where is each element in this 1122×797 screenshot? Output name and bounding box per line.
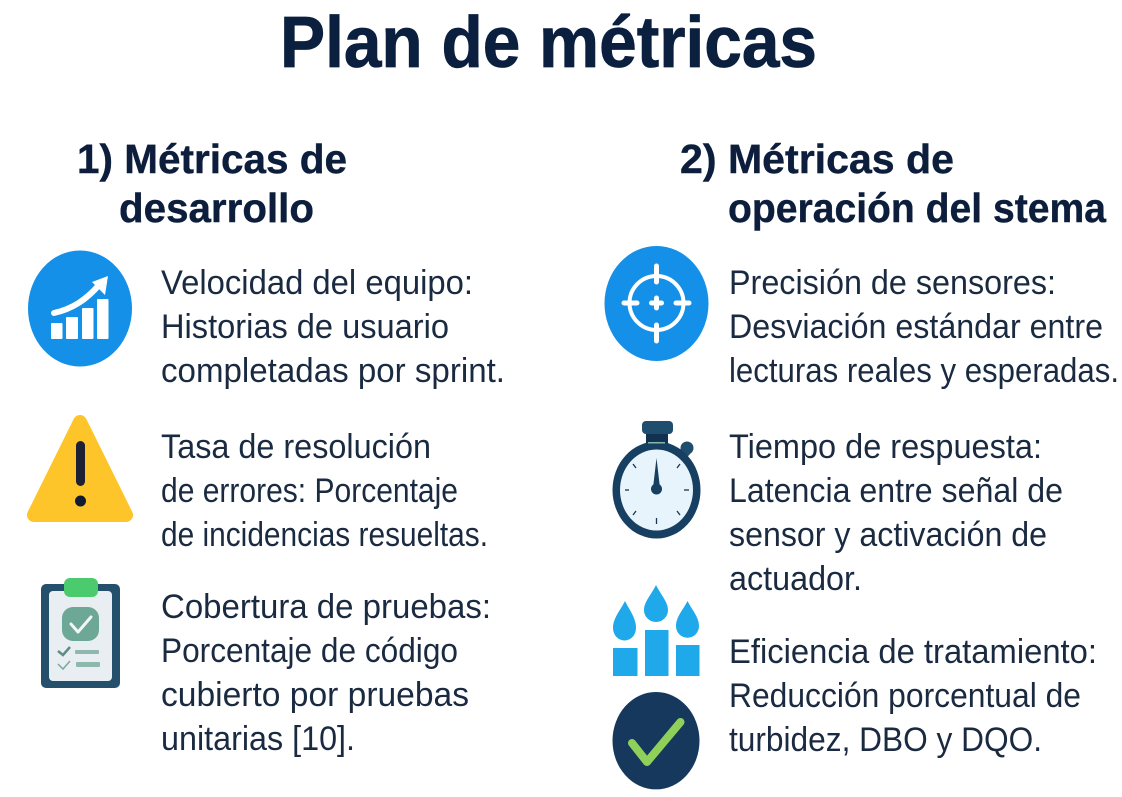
heading: métricas de operación: operación del stema [728,185,1107,231]
text: eficiencia de tratamiento [729,633,1097,759]
icon: stopwatch [612,421,700,538]
text: precisión de sensores: Precisión de sensores: [729,264,1056,302]
icon: growth chart [28,250,132,366]
icon: water drops and bars [613,585,700,676]
heading: métricas de operación [680,136,1107,231]
icon: clipboard [41,578,120,688]
text: precisión de sensores: Desviación estándar entre [729,308,1103,346]
heading: métricas de operación: 2) Métricas de [680,136,954,182]
text: tasa de resolución: de incidencias resueltas. [161,516,488,554]
text: tiempo de respuesta: sensor y activación de [729,516,1047,554]
text: cobertura de pruebas: unitarias [10]. [161,720,355,758]
text: eficiencia de tratamiento: Reducción porcentual de [729,677,1081,715]
text: tasa de resolución [161,428,488,554]
text: cobertura de pruebas: cubierto por pruebas [161,676,469,714]
title: Plan de métricas [280,3,817,83]
text: cobertura de pruebas: Porcentaje de código [161,632,458,670]
icon: target [604,246,708,361]
text: velocidad del equipo [161,264,505,390]
text: velocidad del equipo: Velocidad del equipo: [161,264,473,302]
icon: warning triangle [34,422,126,515]
icon: check circle [612,692,700,789]
text: tasa de resolución: Tasa de resolución [161,428,431,466]
heading: métricas de desarrollo [77,136,347,231]
text: cobertura de pruebas [161,588,491,758]
text: cobertura de pruebas: Cobertura de pruebas: [161,588,491,626]
text: tiempo de respuesta: actuador. [729,560,862,598]
heading: métricas de desarrollo: 1) Métricas de [77,136,347,182]
text: precisión de sensores [729,264,1119,390]
text: velocidad del equipo: Historias de usuario [161,308,449,346]
text: tiempo de respuesta: Tiempo de respuesta: [729,428,1042,466]
text: velocidad del equipo: completadas por sprint. [161,352,505,390]
text: tasa de resolución: de errores: Porcentaje [161,472,458,510]
heading: métricas de desarrollo: desarrollo [119,185,314,231]
text: eficiencia de tratamiento: Eficiencia de tratamiento: [729,633,1097,671]
text: tiempo de respuesta [729,428,1063,598]
text: eficiencia de tratamiento: turbidez, DBO y DQO. [729,721,1042,759]
text: tiempo de respuesta: Latencia entre señal de [729,472,1063,510]
